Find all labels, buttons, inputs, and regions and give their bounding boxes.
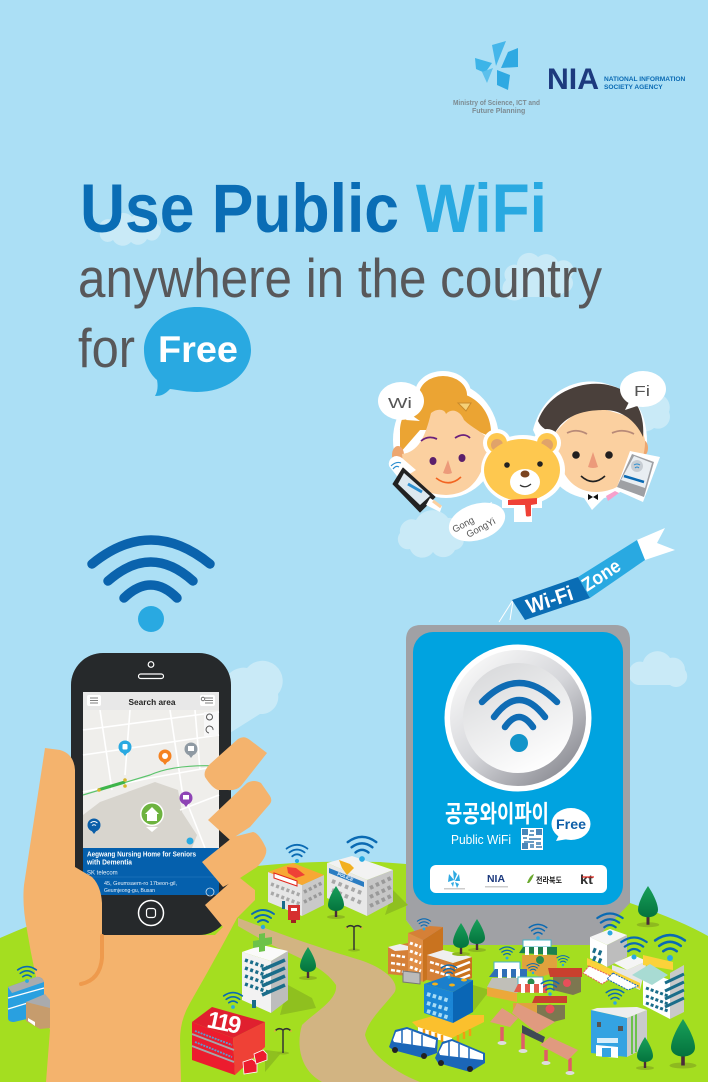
finger 1 xyxy=(205,737,267,790)
speech bubble: Fi: Fi xyxy=(634,383,650,400)
screen header: Search area xyxy=(128,697,176,707)
bear character xyxy=(481,429,565,522)
market stalls xyxy=(487,940,582,1022)
map controls xyxy=(204,712,218,736)
buses xyxy=(389,1027,485,1072)
partner logos bar: kt xyxy=(580,872,594,887)
palm and thumb xyxy=(23,748,255,1082)
speech bubble: Gong GongYi: GongYi xyxy=(465,516,498,541)
ministry star emblem xyxy=(475,41,518,90)
trees xyxy=(299,886,696,1070)
street lamps xyxy=(274,926,363,1054)
finger 3 xyxy=(202,832,266,887)
building: white tower shop xyxy=(632,955,684,1019)
partner logos bar: 전라북도 xyxy=(536,875,563,885)
phone screen map xyxy=(83,692,219,896)
sign korean title: 공공와이파이 xyxy=(445,801,549,828)
green hill xyxy=(0,862,708,1082)
NIA wordmark: NIA xyxy=(547,63,599,96)
building: bookstore xyxy=(591,1007,647,1058)
speech bubble: Gong GongYi xyxy=(444,496,510,548)
stall: green awning xyxy=(519,940,557,977)
thumb crease xyxy=(81,936,102,984)
partner logos bar: NIA xyxy=(487,874,505,885)
road xyxy=(238,918,420,1082)
hand holding phone xyxy=(23,737,271,1082)
phone body xyxy=(71,653,231,935)
building: police: POLICE xyxy=(337,871,354,882)
QR code xyxy=(521,828,543,850)
stall: blue awning xyxy=(487,962,527,1002)
title line 2: anywhere in the country xyxy=(78,248,603,309)
title line 3: for xyxy=(78,318,135,379)
background clouds xyxy=(99,213,687,736)
logo: ministry xyxy=(453,41,540,115)
woman character xyxy=(392,371,499,498)
screen header xyxy=(83,692,219,710)
stall: striped awning xyxy=(514,977,547,993)
title line 1: Use Public xyxy=(80,170,399,247)
speech bubble: Gong GongYi: Gong xyxy=(451,515,476,536)
wifi signals over buildings xyxy=(224,837,685,1009)
stall: front red awning xyxy=(513,996,567,1022)
screen info panel xyxy=(83,848,219,896)
map pins xyxy=(88,740,198,844)
finger 2 xyxy=(208,781,271,840)
Free small bubble: Free xyxy=(556,817,587,832)
sign blue panel xyxy=(413,632,623,905)
partner logos bar xyxy=(430,865,607,893)
wifi: left office xyxy=(18,967,36,983)
public wifi sign xyxy=(406,625,630,945)
banner: Wi-Fi Zone: Zone xyxy=(578,556,625,596)
screen info panel: SK telecom xyxy=(87,870,118,876)
speech bubble: Wi: Wi xyxy=(388,395,412,412)
building: police xyxy=(327,856,393,916)
post box xyxy=(288,905,300,923)
Free speech bubble xyxy=(144,307,251,396)
building: fire station xyxy=(192,1006,267,1075)
building: fire station: 119 xyxy=(205,1006,244,1040)
NIA full name: NATIONAL INFORMATION xyxy=(604,76,686,83)
logo: NIA xyxy=(547,63,686,96)
ministry name: Ministry of Science, ICT and xyxy=(453,100,540,107)
sign subtitle: Public WiFi xyxy=(451,833,511,847)
man holding tablet xyxy=(616,451,660,502)
stall: right red awning xyxy=(548,968,582,995)
traditional gate xyxy=(490,1003,578,1075)
sign frame xyxy=(406,625,630,945)
building: left blue office xyxy=(8,977,50,1029)
building: white shop 1 xyxy=(583,929,627,984)
screen info panel: with Dementia xyxy=(86,858,133,866)
NIA full name: SOCIETY AGENCY xyxy=(604,84,663,91)
banner: Wi-Fi Zone xyxy=(499,528,675,622)
characters group xyxy=(378,371,666,548)
large wifi icon xyxy=(92,540,210,632)
ministry name: Future Planning xyxy=(472,108,525,115)
shadows xyxy=(265,890,490,1072)
screen info panel: Aegwang Nursing Home for Seniors xyxy=(87,850,196,858)
banner: Wi-Fi Zone: Wi-Fi xyxy=(523,582,576,619)
building: apartments xyxy=(388,926,472,985)
man character xyxy=(533,381,648,510)
speech bubble: Fi xyxy=(620,371,666,410)
screen info panel: Geumjeong-gu, Busan xyxy=(104,888,155,894)
building: hospital xyxy=(242,933,288,1013)
screen info panel: 45, Geumsaem-ro 17beon-gil, xyxy=(104,881,177,887)
wifi button xyxy=(444,644,592,792)
speech bubble: Wi xyxy=(378,382,424,421)
phone xyxy=(71,653,231,935)
building: post office xyxy=(268,863,324,916)
Free speech bubble: Free xyxy=(158,329,238,370)
building: white shop 2 xyxy=(607,955,647,990)
title WiFi: WiFi xyxy=(416,170,547,247)
woman holding phone xyxy=(389,456,442,512)
phone camera and speaker xyxy=(138,662,164,678)
building: blue office xyxy=(412,976,484,1043)
phone home button xyxy=(138,900,164,926)
Free small bubble xyxy=(552,808,590,841)
